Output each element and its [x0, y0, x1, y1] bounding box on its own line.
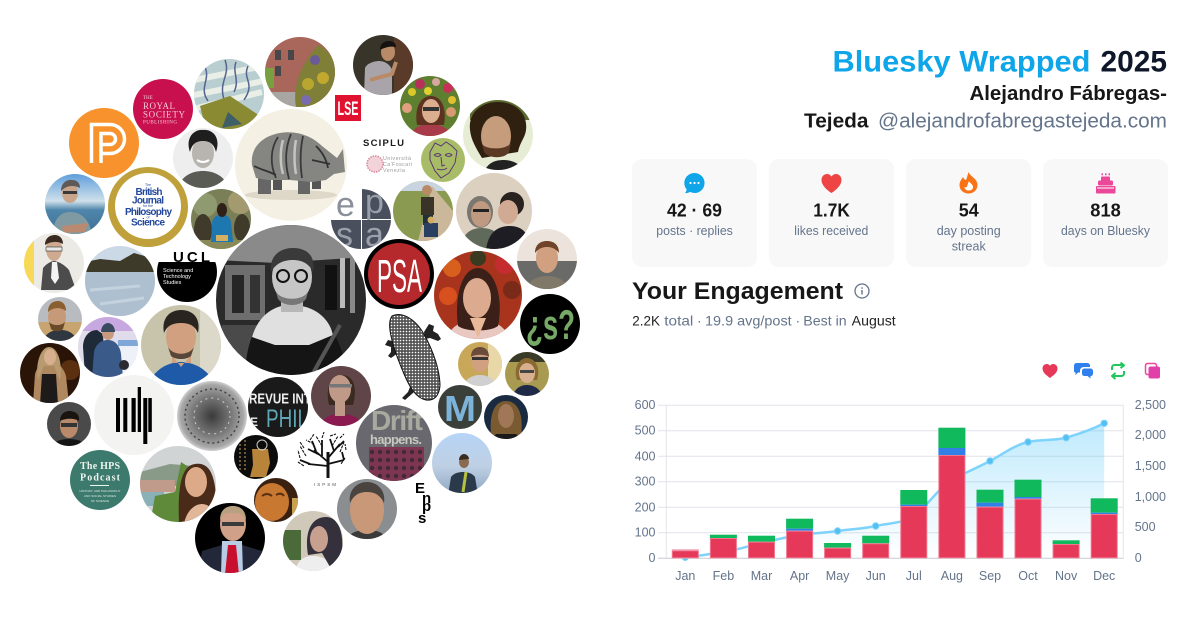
stat card: posting streak: day posting [937, 223, 1001, 238]
avatar: The HPS Podcast logo: The HPS [80, 461, 120, 472]
cumulative line with markers [682, 420, 1107, 560]
author name: Alejandro Fábregas- [970, 83, 1167, 105]
avatar: LSE logo [335, 95, 361, 121]
bar: Dec [1091, 498, 1118, 558]
avatar: SCIPLU and Ca' Foscari logo: Venezia [383, 168, 405, 174]
avatar: Royal Society Publishing logo: THE [143, 96, 153, 101]
x axis month labels: Sep [979, 569, 1001, 583]
left axis labels [635, 398, 656, 565]
avatar: The HPS Podcast logo: HISTORY, AND PHILOSOPHY [79, 489, 121, 493]
avatar: cartoon man with glasses [24, 233, 84, 293]
stat card: likes received: 1.7K [813, 199, 850, 220]
author name [804, 83, 1167, 132]
stat card: posting streak: 54 [959, 199, 979, 220]
engagement summary line: 2.2K [632, 312, 661, 328]
avatar: stippled salamander illustration [385, 315, 441, 400]
avatar: SCIPLU and Ca' Foscari logo: Ca'Foscari [383, 162, 412, 168]
cumulative area fill [685, 423, 1104, 558]
avatar: Royal Society Publishing logo: PUBLISHING [143, 120, 177, 126]
engagement summary line: total [664, 312, 693, 328]
x axis month labels: Oct [1018, 569, 1038, 583]
bar: Mar [748, 536, 775, 558]
title: 2025 [1100, 46, 1167, 78]
panel: avatar bubble cluster [20, 35, 580, 575]
avatar: EPSA logo: a [365, 216, 384, 254]
stat card: days on Bluesky: days on Bluesky [1061, 223, 1150, 238]
avatar: Revue Internationale de Philosophie logo: E [250, 415, 258, 429]
chart legend icons [1042, 362, 1160, 379]
right axis labels: 2,500 [1135, 398, 1166, 412]
avatar: The HPS Podcast logo [70, 450, 130, 510]
avatar: UCL Science and Technology Studies logo: Science and [163, 268, 193, 274]
avatar: question mark logo [520, 294, 580, 354]
avatar: SCIPLU and Ca' Foscari logo [363, 138, 412, 174]
left axis labels: 600 [635, 398, 656, 412]
avatar: green sketch face [421, 138, 465, 182]
bar: Jan [672, 549, 699, 558]
icon: flame [960, 172, 978, 194]
avatar: EPSA logo: e [336, 186, 355, 224]
right axis labels: 1,500 [1135, 459, 1166, 473]
avatar: man in blue polo shirt [141, 305, 221, 386]
engagement summary line: · [796, 312, 800, 328]
engagement summary line: · [697, 312, 702, 328]
legend: replies chat [1074, 363, 1093, 378]
avatar: SCIPLU and Ca' Foscari logo: SCIPLU [363, 138, 404, 149]
avatar: British Journal for the Philosophy of Science logo [108, 167, 188, 247]
bar: Nov [1053, 540, 1080, 558]
avatar: ISPSM tree logo: ISPSM [314, 482, 338, 487]
avatar: British Journal for the Philosophy of Science logo: British [136, 187, 162, 198]
avatar: Royal Society Publishing logo [133, 79, 193, 139]
avatar: Drift happens sign [356, 405, 432, 483]
avatar: UCL Science and Technology Studies logo [157, 249, 217, 304]
avatar: frozen lake with treeline [85, 246, 155, 316]
avatar: Revue Internationale de Philosophie logo [248, 377, 311, 437]
x axis baseline [658, 557, 1123, 559]
title: Bluesky Wrapped [832, 46, 1090, 78]
avatar: Enps stacked wordmark: p [422, 498, 431, 515]
avatar: orange P logo [69, 108, 139, 178]
avatar: man at sunset lake [45, 174, 105, 236]
avatar: UCL Science and Technology Studies logo: Studies [163, 280, 182, 286]
avatar: British Journal for the Philosophy of Science logo: Science [131, 218, 165, 228]
avatar: Drift happens sign: Drift [371, 405, 423, 436]
bar: May [824, 543, 851, 558]
right axis labels [1135, 398, 1166, 565]
x axis month labels: Aug [941, 569, 963, 583]
avatar: Enps stacked wordmark [415, 480, 431, 527]
x axis month labels: Jan [675, 569, 695, 583]
x axis month labels: Feb [713, 569, 734, 583]
avatar: Royal Society Publishing logo: SOCIETY [143, 110, 186, 120]
avatar: EPSA logo: s [336, 216, 353, 254]
avatar: man cycling with child on gravel path [393, 181, 453, 241]
stat card: likes received [769, 159, 894, 267]
avatar: SCIPLU and Ca' Foscari logo: Università [383, 156, 411, 162]
legend: reposts arrows [1112, 362, 1124, 379]
x axis month labels [675, 569, 1115, 583]
avatar: M logo [438, 385, 482, 429]
avatar: Enps stacked wordmark: E [415, 480, 425, 497]
x axis month labels: May [826, 569, 850, 583]
avatar: woman with long blond hair [20, 343, 80, 404]
avatar: brick building with garden [265, 37, 335, 107]
avatar: black barcode logo [94, 375, 174, 455]
bar: Apr [786, 519, 813, 558]
stat card: days on Bluesky: 818 [1090, 199, 1121, 220]
avatar: ISPSM tree logo [298, 432, 346, 487]
x axis month labels: Apr [790, 569, 809, 583]
left axis labels: 200 [635, 500, 656, 514]
avatar: Dürer rhinoceros engraving [235, 109, 347, 221]
left axis labels: 300 [635, 474, 656, 488]
avatar: woman with throne illustration [234, 435, 278, 479]
chart: monthly engagement stacked bars with cumulative line [635, 398, 1166, 583]
x axis month labels: Jun [866, 569, 886, 583]
avatar: bearded man in desert [38, 297, 82, 342]
avatar: British Journal for the Philosophy of Science logo: Philosophy [125, 207, 172, 218]
avatar: young man with white brick wall [517, 229, 577, 290]
stat card: posts and replies: 42 · 69 [667, 199, 722, 220]
avatar: Royal Society Publishing logo: ROYAL [143, 101, 175, 111]
avatar: woman with glasses and magenta top [311, 366, 371, 428]
avatar: river delta map [194, 59, 264, 130]
avatar: EPSA logo [331, 189, 391, 249]
stat card: days on Bluesky [1043, 159, 1168, 267]
avatar: bald man with glasses in cream sweater [458, 342, 502, 387]
avatar: woman among flowers [400, 76, 460, 138]
engagement summary line [632, 312, 896, 328]
avatar: The HPS Podcast logo: AND SOCIAL STUDIES [84, 494, 116, 498]
bar: Oct [1014, 480, 1042, 558]
avatar: couple portrait [456, 173, 532, 250]
avatar: woman on the Italian coast [140, 446, 216, 524]
author handle: @alejandrofabregastejeda.com [878, 110, 1167, 132]
x axis month labels: Dec [1093, 569, 1115, 583]
avatar: long-haired man [484, 395, 528, 440]
avatar: smiling curly-haired man [173, 128, 233, 190]
avatar: man with grey hair [337, 479, 397, 540]
stat card: likes received: likes received [794, 223, 868, 238]
author name: Tejeda [804, 110, 869, 132]
right axis labels: 1,000 [1135, 490, 1166, 504]
avatar: LSE logo: LSE [338, 99, 358, 120]
avatar: Drift happens sign: happens. [370, 432, 422, 447]
avatar: woman with glasses in field [505, 352, 549, 398]
avatar: Revue Internationale de Philosophie logo: PHIL [266, 405, 308, 433]
x axis month labels: Mar [751, 569, 772, 583]
avatar: British Journal for the Philosophy of Science logo: The [145, 183, 151, 187]
heading: Your Engagement: Your Engagement [632, 278, 843, 305]
left axis labels: 500 [635, 424, 656, 438]
x axis month labels: Jul [906, 569, 922, 583]
avatar: Revue Internationale de Philosophie logo: REVUE INT [249, 390, 311, 408]
stat card: posting streak: streak [952, 238, 986, 253]
avatar: Enps stacked wordmark: s [418, 510, 426, 527]
bar: Jun [862, 536, 889, 558]
left axis labels: 0 [649, 551, 656, 565]
bar: Aug [938, 428, 965, 558]
avatar: woman selfie with plant [283, 511, 343, 572]
avatar: Enps stacked wordmark: n [422, 490, 431, 507]
stat card: posting streak [906, 159, 1031, 267]
avatar: British Journal for the Philosophy of Science logo: of [147, 216, 149, 220]
right axis labels: 2,000 [1135, 428, 1166, 442]
avatar: curly-haired bearded man [463, 100, 533, 172]
avatar: question mark logo: ¿s? [526, 301, 575, 348]
avatar: PSA logo: PSA [377, 250, 422, 302]
bar: Jul [900, 490, 927, 558]
stat card: posts and replies: posts · replies [656, 223, 733, 238]
avatar: British Journal for the Philosophy of Science logo: Journal [132, 196, 164, 206]
avatar: man with glasses, dark hair [47, 402, 91, 447]
stat card: posts and replies [632, 159, 757, 267]
legend: likes heart [1042, 364, 1058, 378]
engagement summary line: 19.9 avg/post [705, 312, 792, 328]
bar: Feb [710, 535, 737, 558]
icon: info [855, 284, 869, 298]
avatar: man by the sea under blue sky [432, 433, 492, 495]
left axis labels: 100 [635, 526, 656, 540]
legend: quotes copy [1146, 364, 1160, 378]
avatar: hiker in snowy landscape [78, 317, 138, 378]
left axis labels: 400 [635, 450, 656, 464]
engagement summary line: August [852, 312, 896, 328]
avatar: bald man looking up [254, 478, 300, 522]
x axis month labels: Nov [1055, 569, 1078, 583]
chart gridlines [658, 405, 1123, 558]
avatar: man in suit and red tie [195, 503, 265, 575]
right axis labels: 0 [1135, 551, 1142, 565]
bar: Sep [976, 490, 1004, 558]
avatar: British Journal for the Philosophy of Science logo: for the [143, 204, 153, 208]
avatar: EPSA logo: p [365, 183, 384, 221]
avatar: grey scribble circle [177, 381, 247, 451]
avatar: woman among orange flowers [434, 250, 522, 340]
avatar: man with glasses speaking [353, 35, 413, 96]
avatar: UCL Science and Technology Studies logo: UCL [173, 249, 210, 266]
avatar: M logo: M [444, 388, 476, 429]
engagement summary line: Best in [803, 312, 847, 328]
avatar: PSA logo [364, 239, 434, 309]
icon: birthday cake [1096, 173, 1116, 194]
avatar: UCL Science and Technology Studies logo: Technology [163, 274, 191, 280]
avatar: woman hiking in blue jacket [191, 189, 252, 250]
icon: chat bubble [684, 173, 705, 193]
avatar: main profile photo, black and white portrait [216, 225, 366, 380]
avatar: The HPS Podcast logo: Podcast [80, 472, 121, 484]
right axis labels: 500 [1135, 520, 1156, 534]
avatar: The HPS Podcast logo: OF SCIENCE [91, 499, 109, 503]
icon: heart [822, 174, 842, 193]
